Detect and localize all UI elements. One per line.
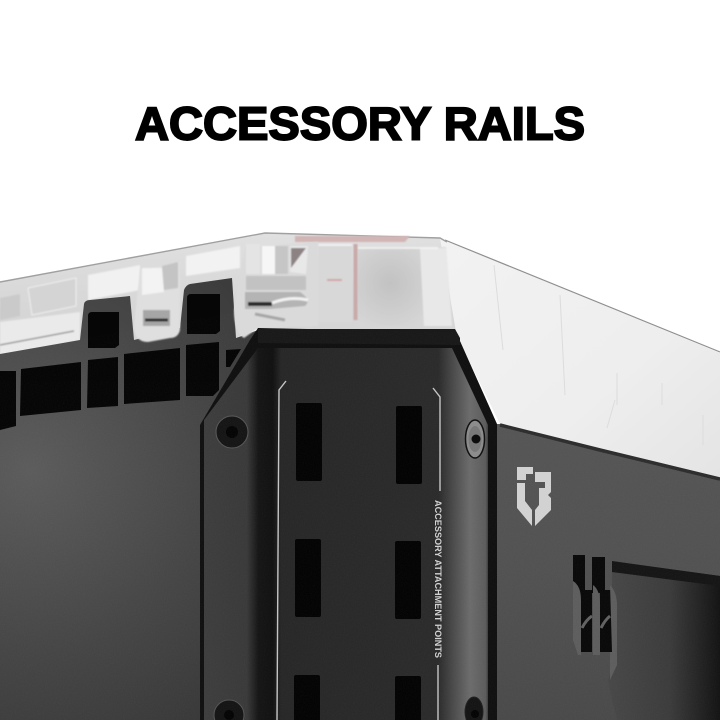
icon: screw bottom right [465,697,483,720]
corner bracket [200,328,497,720]
icon: screw top right [466,420,484,458]
icon: brand logo [517,467,551,526]
clear side panel: right face [440,238,720,479]
slots [294,403,422,720]
vent holes [0,294,241,430]
clip: left [134,262,180,342]
clear side panel: left face [0,233,456,358]
label: accessory attachment points: ACCESSORY ATTACHMENT POINTS [432,500,443,658]
window opening [608,561,720,720]
clip: right [234,242,318,338]
rail guide lines [277,381,440,720]
case metal: left panel [0,278,258,720]
case metal: right panel [492,424,720,720]
title: ACCESSORY RAILS [135,98,585,150]
retention slits [573,555,617,680]
icon: screw bottom left [214,700,244,720]
icon: screw top left [216,416,248,448]
